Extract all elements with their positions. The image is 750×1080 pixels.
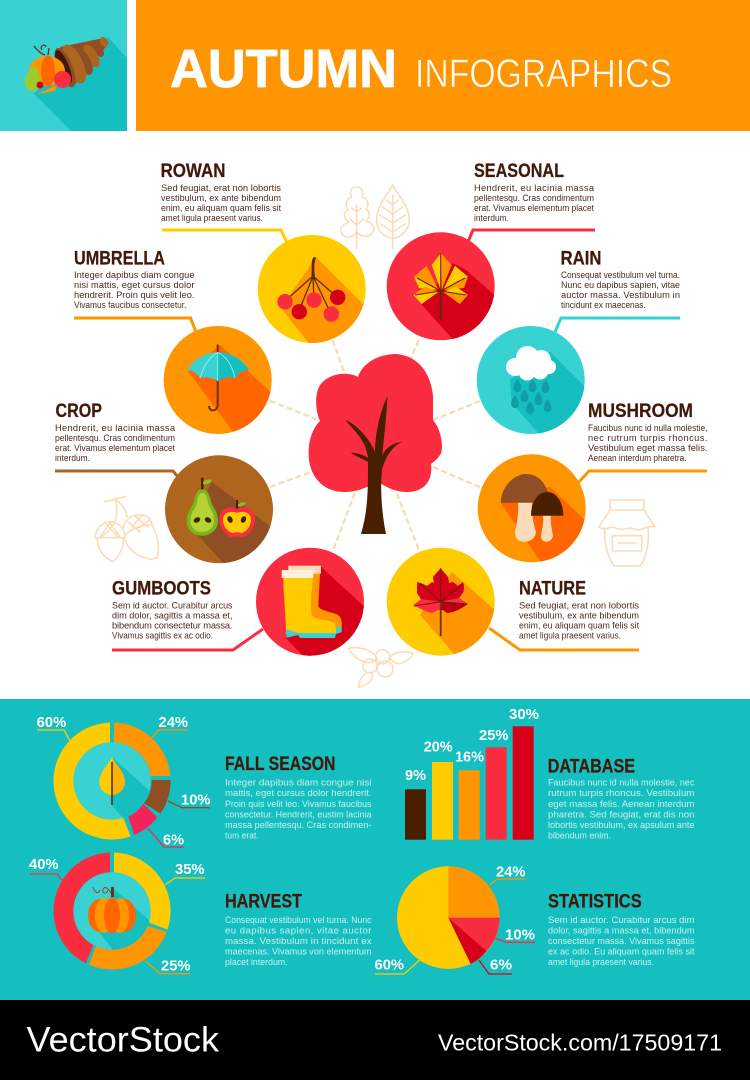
heading: nature: NATURE (519, 578, 586, 600)
heading: umbrella: UMBRELLA (74, 247, 165, 269)
text: rowan body (161, 183, 281, 223)
text: seasonal body (474, 183, 595, 223)
label: 24%: 24% (496, 865, 526, 881)
icon: leaf (99, 757, 125, 805)
panel: fall season text (225, 753, 372, 841)
icon: umbrella (164, 326, 275, 440)
text: mushroom body: Aenean interdum pharetra. (588, 453, 687, 463)
label: 6%: 6% (163, 832, 184, 848)
chart: database bars: 30% (509, 707, 539, 723)
text: crop body: Hendrerit, eu lacinia massa (55, 423, 176, 433)
text: fall season body: tum erat. (225, 830, 259, 841)
text: database body (548, 778, 695, 841)
label: 6% (479, 957, 512, 974)
label: 10% (168, 792, 211, 808)
text: harvest body: massa. Vestibulum in tincidunt ex (225, 936, 372, 947)
panel: seasonal (387, 160, 595, 345)
label: 24%: 24% (158, 715, 188, 731)
icon: autumn tree (309, 354, 442, 534)
text: rowan body: vestibulum, ex ante bibendum (161, 193, 281, 203)
icon: pumpkin (88, 887, 136, 934)
title: AUTUMN: AUTUMN (170, 39, 397, 99)
header banner (136, 0, 750, 131)
heading: mushroom: MUSHROOM (588, 400, 693, 422)
text: rowan body: amet ligula praesent varius. (161, 213, 263, 223)
text: umbrella body: hendrerit. Proin quis velit leo. (74, 290, 194, 300)
footer: image URL text: VectorStock.com/17509171 (438, 1030, 722, 1056)
text: seasonal body: erat. Vivamus elementum placet (474, 203, 594, 213)
text: umbrella body (74, 270, 194, 310)
panel: database text (548, 756, 695, 841)
icon: pear and apple (165, 455, 275, 570)
text: fall season body: Integer dapibus diam congue nisi (225, 778, 372, 789)
text: seasonal body: interdum. (474, 213, 509, 223)
text: statistics body: consectetur massa. Vivamus sagittis (548, 936, 695, 947)
label: 40%: 40% (29, 857, 59, 873)
text: rain body: tincidunt ex maecenas. (561, 300, 646, 310)
chart: database bars (405, 707, 539, 840)
text: mushroom body: nec rutrum turpis rhoncus. (588, 433, 708, 443)
text: gumboots body (112, 601, 233, 641)
icon: cornucopia (25, 35, 110, 94)
footer bar (0, 1000, 750, 1080)
label: 35%: 35% (175, 862, 205, 878)
label: 24% (152, 715, 188, 738)
panel: mushroom (478, 400, 708, 570)
text: rain body: Nunc eu dapibus sapien, vitae (561, 280, 680, 290)
label: 60% (374, 957, 420, 974)
text: nature body (519, 601, 639, 641)
text: nature body: amet ligula praesent varius. (519, 631, 621, 641)
label: 24% (490, 865, 526, 885)
panel: rowan (161, 163, 366, 343)
text: nature body: vestibulum, ex ante bibendum (519, 611, 639, 621)
text: mushroom body: Faucibus nunc id nulla molestie, (588, 423, 708, 433)
heading: crop: CROP (56, 400, 102, 422)
heading: fall season: FALL SEASON (225, 753, 336, 775)
decor: oak leaf (341, 187, 374, 248)
chart: database bars: 25% (479, 728, 509, 744)
chart: harvest donut (29, 852, 205, 975)
dashed connectors (270, 340, 480, 549)
text: nature body: Sed feugiat, erat non lobortis (519, 601, 639, 611)
icon: rain cloud (477, 326, 590, 440)
icon: maple leaf (387, 548, 497, 660)
text: crop body: interdum. (55, 453, 90, 463)
chart: fall season donut (37, 715, 211, 848)
label: 6% (148, 828, 184, 848)
panel: rain (477, 247, 680, 440)
text: gumboots body: Vivamus sagittis ex ac odio. (112, 631, 213, 641)
chart: statistics pie (374, 865, 535, 974)
text: fall season body: massa pellentesqu. Cras condimen- (225, 820, 372, 831)
text: rain body: auctor massa. Vestibulum in (561, 290, 680, 300)
text: statistics body: ex ac odio. Eu aliquam quam felis sit (548, 947, 695, 958)
label: 35% (165, 862, 205, 885)
text: database body: lobortis vestibulum, ex apsulum ante (548, 820, 694, 831)
panel: statistics section background (0, 699, 750, 1000)
label: 40% (29, 857, 62, 880)
text: crop body (55, 423, 176, 463)
label: 6%: 6% (490, 957, 512, 973)
panel: crop (55, 400, 275, 570)
text: gumboots body: Sem id auctor. Curabitur arcus (112, 601, 233, 611)
decor: berries (348, 648, 413, 687)
label: 60% (37, 715, 70, 741)
panel: nature (387, 548, 639, 660)
panel: statistics text (548, 890, 695, 968)
panel: gumboots (112, 548, 368, 660)
heading: rain: RAIN (560, 247, 602, 269)
footer: VectorStock logo: VectorStock (26, 1021, 220, 1060)
text: crop body: pellentesqu. Cras condimentum (55, 433, 175, 443)
icon: chestnut leaf (387, 232, 500, 345)
text: mushroom body: Vestibulum eget massa felis. (588, 443, 708, 453)
text: fall season body: consectetur. Hendrerit, eustim lacinia (225, 809, 372, 820)
label: 10%: 10% (505, 927, 535, 943)
text: statistics body: dolor, sagittis a massa et, bibendum (548, 926, 694, 936)
label: 10%: 10% (181, 792, 211, 808)
text: gumboots body: bibendum consectetur massa. (112, 621, 232, 631)
heading: gumboots: GUMBOOTS (112, 578, 211, 600)
panel: umbrella (74, 247, 275, 440)
text: seasonal body: Hendrerit, eu lacinia massa (474, 183, 595, 193)
label: 25% (145, 959, 191, 975)
text: crop body: erat. Vivamus elementum placet (55, 443, 175, 453)
heading: seasonal: SEASONAL (474, 160, 564, 182)
icon: rowan berries (258, 235, 366, 343)
text: rain body (561, 270, 680, 310)
text: rain body: Consequat vestibulum vel turna. (561, 270, 680, 280)
text: gumboots body: dim dolor, sagittis a massa et, (112, 611, 232, 621)
text: umbrella body: Integer dapibus diam congue (74, 270, 194, 280)
heading: harvest: HARVEST (225, 890, 302, 912)
text: umbrella body: nisi mattis, eget cursus dolor (74, 280, 194, 290)
label: 60%: 60% (37, 715, 66, 731)
label: 60%: 60% (374, 957, 404, 973)
text: umbrella body: Vivamus faucibus consectetur. (74, 300, 186, 310)
heading: database: DATABASE (548, 756, 635, 778)
decor: acorns (95, 497, 158, 562)
text: statistics body: amet ligula praesent varius. (548, 957, 654, 968)
text: harvest body: eu dapibus sapien, vitae auctor (225, 926, 372, 936)
chart: database bars: 16% (455, 750, 484, 766)
text: harvest body: Consequat vestibulum vel turna. Nunc (225, 915, 372, 926)
text: database body: rutrum turpis rhoncus. Vestibulum (548, 788, 695, 799)
text: database body: bibendum enim. (548, 830, 611, 841)
header icon panel (0, 0, 127, 131)
text: harvest body: maecenas. Vivamus von elementum (225, 947, 372, 958)
chart: database bars: 9% (405, 768, 426, 784)
text: fall season body (225, 778, 372, 841)
text: harvest body (225, 915, 372, 968)
text: rowan body: Sed feugiat, erat non lobortis (161, 183, 281, 193)
heading: rowan: ROWAN (160, 160, 226, 182)
icon: gumboots (256, 548, 368, 660)
text: mushroom body (588, 423, 708, 463)
chart: database bars: 20% (424, 739, 453, 755)
text: database body: pharetra. Sed feugiat, erat dis non (548, 809, 694, 820)
text: fall season body: Proin quis velit leo. Vivamus faucibus (225, 799, 372, 810)
text: statistics body (548, 915, 695, 968)
text: database body: eget massa felis. Aenean interdum (548, 799, 694, 810)
text: fall season body: mattis, eget cursus dolor hendrerit. (225, 788, 372, 799)
text: nature body: enim, eu aliquam quam felis sit (519, 621, 639, 631)
label: 25%: 25% (161, 959, 191, 975)
text: harvest body: placet interdum. (225, 957, 288, 968)
text: rowan body: enim, eu aliquam quam felis sit (161, 203, 281, 213)
text: database body: Faucibus nunc id nulla molestie, nec (548, 778, 695, 789)
decor: veined leaf (377, 185, 409, 248)
text: seasonal body: pellentesqu. Cras condimentum (474, 193, 594, 203)
decor: jar (599, 500, 655, 566)
icon: mushrooms (478, 454, 590, 570)
panel: harvest text (225, 890, 372, 968)
subtitle: INFOGRAPHICS: INFOGRAPHICS (415, 52, 672, 96)
heading: statistics: STATISTICS (548, 890, 642, 912)
text: statistics body: Sem id auctor. Curabitur arcus dim (548, 915, 695, 926)
